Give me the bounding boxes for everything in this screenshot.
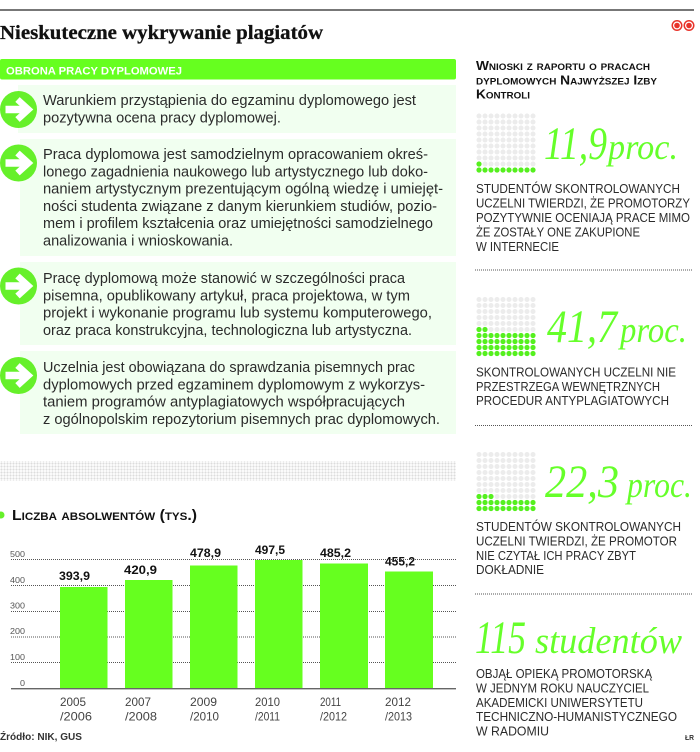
year labels: 2011: [320, 695, 341, 709]
bar chart: liczba absolwentów: [0, 507, 456, 724]
caption: W JEDNYM ROKU NAUCZYCIEL: [476, 680, 649, 696]
title: Nieskuteczne wykrywanie plagiatów: [0, 22, 324, 44]
value labels: 420,9: [124, 565, 157, 577]
big number 41,7: proc.: [617, 310, 687, 350]
top rule: [0, 9, 694, 11]
y axis labels: 200: [10, 626, 25, 636]
axis line: [11, 688, 456, 689]
year labels: 2010: [255, 695, 280, 709]
caption: [476, 666, 677, 738]
right column heading: Wnioski z raportu o pracach: [476, 59, 650, 73]
text block 3: oraz praca konstrukcyjna, technologiczna lub artystyczna.: [43, 323, 412, 339]
caption: PRZESTRZEGA WEWNĘTRZNYCH: [476, 379, 660, 394]
dot chart 11,9: [476, 113, 536, 173]
author initials: ŁR: [685, 733, 695, 742]
text block 2: analizowania i wnioskowania.: [43, 234, 233, 250]
value labels: 393,9: [59, 571, 90, 583]
text block 1: [0, 85, 456, 133]
right column heading: Kontroli: [476, 88, 530, 102]
section heading bar: OBRONA PRACY DYPLOMOWEJ: [6, 66, 182, 78]
big number 11,9: proc.: [605, 127, 678, 167]
y axis labels: 0: [20, 678, 25, 688]
year labels: /2012: [320, 710, 347, 724]
bars: [60, 560, 433, 688]
text block 4: taniem programów antyplagiatowych współpracujących: [43, 395, 405, 411]
section heading bar: [0, 59, 456, 80]
text block 3: [0, 262, 456, 345]
year labels: /2008: [125, 710, 157, 724]
big number 115: [475, 612, 682, 664]
big number 115: studentów: [535, 621, 682, 662]
text block 3: pisemna, opublikowany artykuł, praca projektowa, w tym: [43, 288, 410, 304]
text block 2: [0, 139, 456, 256]
source note: Źródło: NIK, GUS: [0, 730, 82, 743]
text block 2: Praca dyplomowa jest samodzielnym opracowaniem okreś-: [43, 147, 428, 163]
chart heading: Liczba absolwentów (tys.): [12, 507, 197, 524]
y axis labels: 400: [10, 575, 25, 585]
caption: ŻE ZOSTAŁY ONE ZAKUPIONE: [476, 224, 640, 240]
caption: DOKŁADNIE: [476, 562, 544, 577]
text block 3: Pracę dyplomową może stanowić w szczególności praca: [43, 271, 406, 287]
big number 22,3: proc.: [624, 465, 692, 505]
stat: 11,9 proc.: [476, 113, 690, 254]
big number 22,3: [545, 456, 692, 508]
text block 4: [0, 351, 456, 434]
stat: 22,3 proc.: [476, 452, 692, 577]
y axis labels: 500: [10, 549, 25, 559]
year labels: /2010: [190, 710, 219, 724]
icon: copyright logos: [672, 20, 694, 31]
caption: [476, 364, 676, 408]
year labels: 2007: [125, 695, 151, 709]
y axis labels: 100: [10, 652, 25, 662]
big number 11,9: [544, 118, 678, 170]
dot chart 22,3: [476, 452, 536, 512]
caption: TECHNICZNO-HUMANISTYCZNEGO: [476, 709, 677, 724]
year labels: /2011: [255, 710, 280, 724]
value labels: 478,9: [190, 548, 221, 560]
text block 2: ności studenta związane z danym kierunkiem studiów, pozio-: [43, 199, 437, 215]
y axis labels: [10, 549, 25, 688]
value labels: [59, 545, 415, 583]
year labels: [60, 695, 412, 724]
caption: OBJĄŁ OPIEKĄ PROMOTORSKĄ: [476, 666, 652, 681]
caption: SKONTROLOWANYCH UCZELNI NIE: [476, 364, 676, 380]
caption: STUDENTÓW SKONTROLOWANYCH: [476, 519, 681, 534]
text block 2: lonego zagadnienia naukowego lub artystycznego lub doko-: [43, 164, 428, 180]
text block 4: Uczelnia jest obowiązana do sprawdzania pisemnych prac: [43, 360, 415, 376]
big number 11,9: 11,9: [544, 118, 607, 170]
caption: [476, 181, 690, 254]
text block 4: dyplomowych przed egzaminem dyplomowym z wykorzys-: [43, 377, 425, 393]
text block 1: pozytywna ocena pracy dyplomowej.: [43, 110, 281, 126]
text block 1: Warunkiem przystąpienia do egzaminu dyplomowego jest: [43, 93, 416, 109]
stat: 115 studentów: [475, 612, 682, 738]
value labels: 497,5: [255, 545, 286, 557]
right column heading: dyplomowych Najwyższej Izby: [476, 74, 657, 88]
right column heading: [476, 59, 657, 102]
text block 3: projekt i wykonanie programu lub systemu komputerowego,: [43, 306, 432, 322]
year labels: 2009: [190, 695, 217, 709]
stat: 41,7 proc.: [476, 296, 687, 408]
panel: obrona pracy dyplomowej: [0, 59, 456, 434]
caption: W RADOMIU: [476, 724, 549, 738]
caption: PROCEDUR ANTYPLAGIATOWYCH: [476, 393, 669, 408]
caption: NIE CZYTAŁ ICH PRACY ZBYT: [476, 548, 636, 563]
dot chart 41,7: [476, 296, 536, 356]
caption: W INTERNECIE: [476, 239, 559, 254]
value labels: 485,2: [320, 548, 351, 560]
text block 4: z ogólnopolskim repozytorium pisemnych prac dyplomowych.: [43, 412, 440, 428]
caption: UCZELNI TWIERDZI, ŻE PROMOTOR: [476, 534, 677, 548]
caption: STUDENTÓW SKONTROLOWANYCH: [476, 181, 680, 196]
y axis labels: 300: [10, 600, 25, 610]
year labels: /2006: [60, 710, 92, 724]
dotted band: [0, 461, 456, 481]
big number 22,3: 22,3: [545, 456, 619, 508]
caption: [476, 519, 681, 577]
caption: AKADEMICKI UNIWERSYTETU: [476, 695, 643, 710]
year labels: /2013: [385, 710, 412, 724]
big number 41,7: 41,7: [547, 301, 619, 353]
year labels: 2012: [385, 695, 411, 709]
year labels: 2005: [60, 695, 86, 709]
text block 2: naniem artystycznym prezentującym ogólną wiedzę i umiejęt-: [43, 182, 443, 198]
big number 41,7: [547, 301, 687, 353]
value labels: 455,2: [385, 556, 415, 568]
text block 2: mem i profilem kształcenia oraz umiejętności samodzielnego: [43, 216, 433, 232]
big number 115: 115: [475, 612, 526, 664]
